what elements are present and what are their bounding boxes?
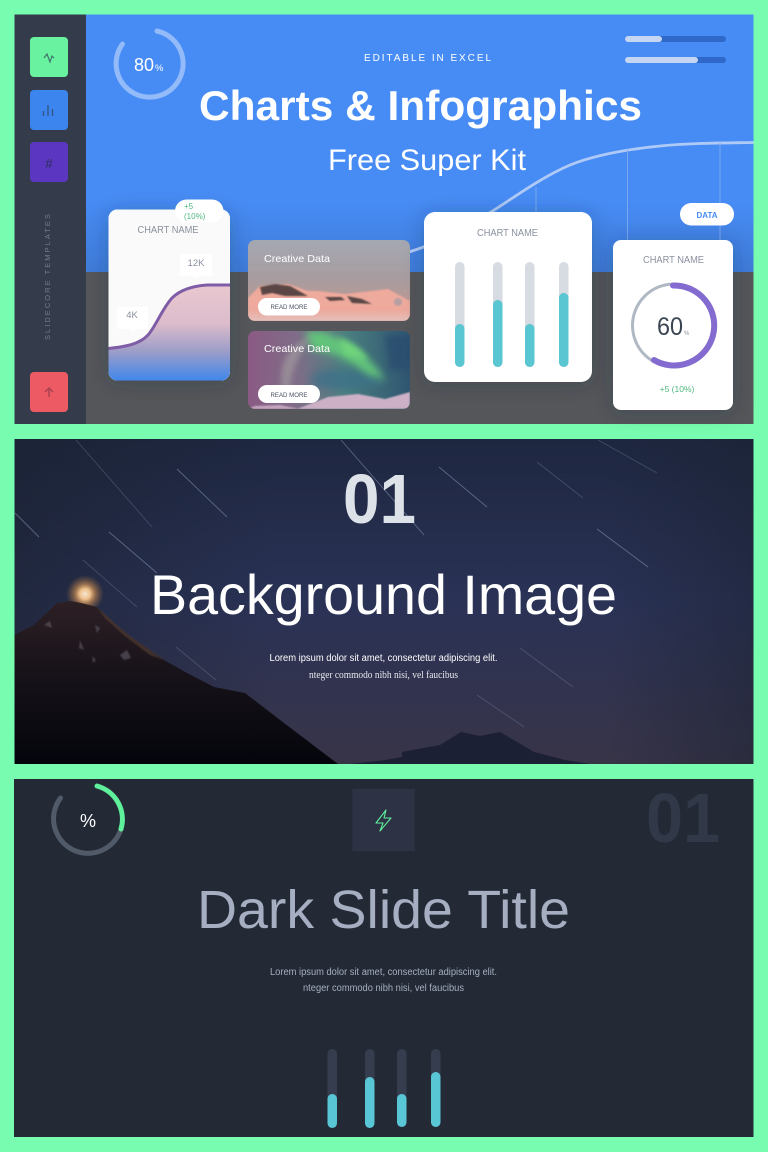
panel: donut card bbox=[613, 240, 733, 410]
ghost section number: 01 bbox=[646, 779, 720, 857]
title: Charts & Infographics bbox=[199, 82, 642, 129]
donut chart 60%: 60 bbox=[657, 313, 683, 341]
icon: hash button bbox=[30, 142, 68, 182]
icon: lightning bolt tile bbox=[352, 789, 414, 851]
vertical brand text: SLIDECORE TEMPLATES bbox=[43, 214, 52, 340]
read more button bbox=[258, 385, 320, 403]
mountain silhouette bbox=[14, 601, 338, 764]
body copy: Lorem ipsum dolor sit amet, consectetur adipiscing elit. bbox=[270, 967, 497, 978]
data pill bbox=[680, 203, 734, 226]
card heading: CHART NAME bbox=[643, 255, 704, 266]
area chart bbox=[108, 285, 230, 381]
panel: kit overview bbox=[14, 14, 754, 424]
panel: area chart card bbox=[108, 200, 230, 381]
progress ring 80%: % bbox=[155, 63, 164, 74]
progress ring percent bbox=[54, 786, 122, 853]
change label: +5 (10%) bbox=[660, 384, 695, 394]
callout 12K: 12K bbox=[188, 258, 205, 269]
progress ring 80%: 80 bbox=[134, 55, 154, 75]
progress bars top right bbox=[625, 36, 726, 63]
read more button bbox=[258, 298, 320, 316]
panel: bar chart card bbox=[424, 212, 592, 382]
read more button: READ MORE bbox=[270, 304, 308, 311]
background trend line bbox=[405, 142, 754, 253]
donut chart 60% bbox=[632, 284, 716, 367]
icon: bar chart button bbox=[30, 90, 68, 130]
body copy bbox=[270, 653, 498, 681]
card heading: CHART NAME bbox=[477, 228, 538, 239]
callout 4K bbox=[117, 307, 148, 332]
progress ring 80% bbox=[116, 31, 183, 97]
bar chart bbox=[328, 1049, 440, 1128]
change pill: +5 bbox=[184, 202, 194, 211]
body copy: nteger commodo nibh nisi, vel faucibus bbox=[309, 670, 458, 681]
body copy bbox=[270, 967, 497, 994]
body copy: nteger commodo nibh nisi, vel faucibus bbox=[303, 983, 464, 994]
callout 4K: 4K bbox=[126, 310, 138, 321]
change pill bbox=[175, 200, 224, 222]
progress ring percent: % bbox=[80, 811, 96, 831]
glow on the summit bbox=[66, 575, 104, 613]
slide heading: Dark Slide Title bbox=[197, 880, 570, 940]
card heading: CHART NAME bbox=[138, 225, 199, 236]
slide heading: Background Image bbox=[150, 563, 617, 626]
icon: hash button: # bbox=[45, 156, 53, 171]
distant ridge bbox=[350, 732, 590, 764]
subtitle: Free Super Kit bbox=[328, 144, 527, 177]
body copy: Lorem ipsum dolor sit amet, consectetur adipiscing elit. bbox=[270, 653, 498, 664]
icon: up arrow button bbox=[30, 372, 68, 412]
panel: background image slide bbox=[14, 439, 754, 764]
star trails bbox=[15, 440, 657, 727]
data pill: DATA bbox=[696, 211, 718, 220]
bar chart bbox=[455, 262, 568, 367]
read more button: READ MORE bbox=[270, 392, 308, 399]
panel: photo card aurora bbox=[248, 331, 412, 409]
change pill: (10%) bbox=[184, 212, 206, 221]
icon: pulse button bbox=[30, 37, 68, 77]
card label: Creative Data bbox=[264, 343, 330, 355]
callout 12K bbox=[180, 254, 212, 279]
panel: dark slide bbox=[14, 779, 754, 1137]
section number: 01 bbox=[343, 460, 416, 538]
donut chart 60%: % bbox=[684, 331, 690, 337]
sidebar bbox=[14, 14, 86, 424]
eyebrow text: EDITABLE IN EXCEL bbox=[364, 53, 491, 64]
card label: Creative Data bbox=[264, 253, 330, 265]
panel: photo card mountains bbox=[248, 240, 410, 321]
